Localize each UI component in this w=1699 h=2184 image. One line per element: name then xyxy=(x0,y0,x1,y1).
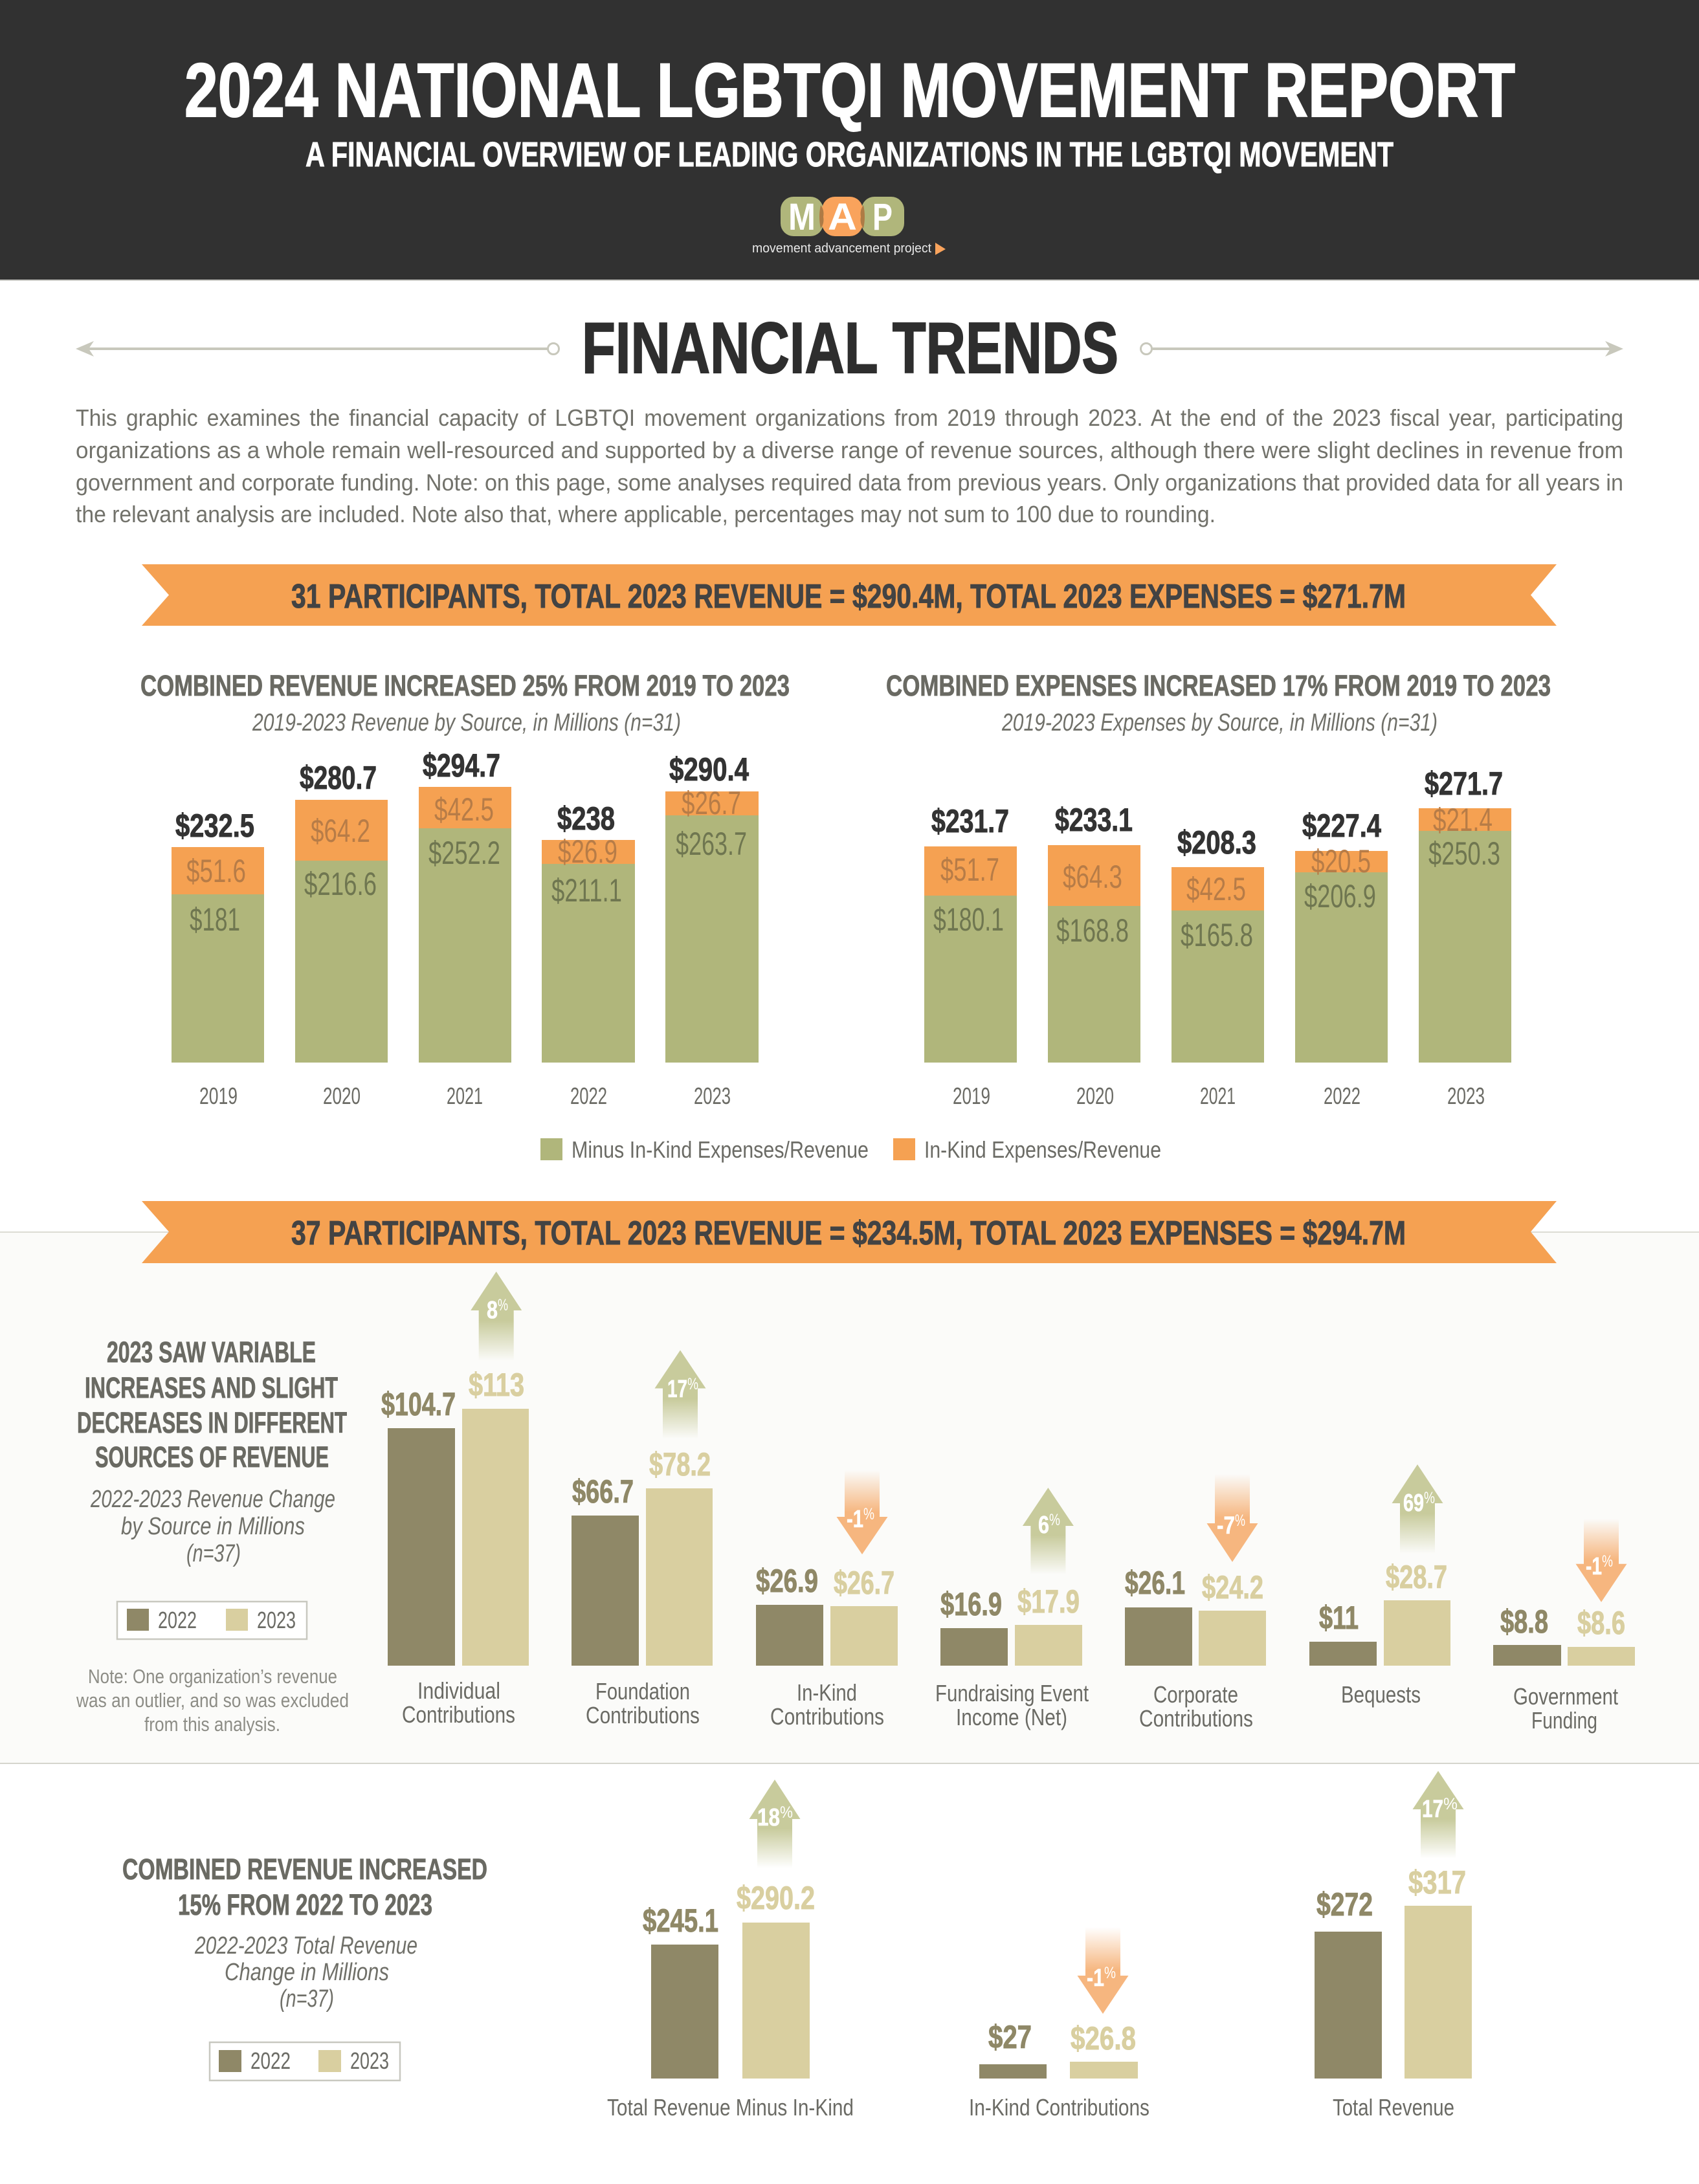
group: bequests: $28.7 xyxy=(1386,1559,1447,1595)
bar: 2020 expenses: $64.3 xyxy=(1063,859,1122,895)
subheading: total revenue change: Change in Millions xyxy=(225,1959,389,1986)
group: in-kind contributions: % xyxy=(863,1505,874,1523)
group: in-kind contributions: Contributions xyxy=(770,1703,884,1730)
bar: 2019 revenue xyxy=(172,808,264,1109)
bar: 2021 expenses xyxy=(1172,824,1264,1109)
note: outlier excluded xyxy=(76,1665,349,1736)
group: foundation contributions: Foundation xyxy=(595,1678,690,1704)
panel: combined revenue chart xyxy=(140,669,790,1109)
bar: 2023 revenue: $290.4 xyxy=(669,751,749,788)
group: total in-kind contributions: -1 xyxy=(1087,1965,1104,1992)
bar: 2021 expenses: $165.8 xyxy=(1181,917,1253,953)
banner: 31 participants: 31 PARTICIPANTS, TOTAL 2023 REVENUE = $290.4M, TOTAL 2023 EXPENSES = $271.7M xyxy=(291,578,1406,615)
logo: MAP: M xyxy=(788,196,816,238)
subheading: total revenue change: 2022-2023 Total Revenue xyxy=(194,1932,417,1959)
bar: 2019 expenses: $180.1 xyxy=(933,901,1004,938)
subheading: revenue change by source: by Source in Millions xyxy=(121,1513,305,1540)
logo: MAP: A xyxy=(828,196,857,238)
bar: 2023 expenses: $21.4 xyxy=(1433,802,1493,838)
bar: 2020 expenses: 2020 xyxy=(1076,1083,1114,1109)
group: in-kind contributions: In-Kind xyxy=(797,1679,857,1706)
group: individual contributions: % xyxy=(498,1296,508,1314)
group: total in-kind contributions: In-Kind Contributions xyxy=(969,2094,1149,2121)
group: foundation contributions: $78.2 xyxy=(649,1446,711,1483)
group: corporate contributions: $26.1 xyxy=(1125,1565,1185,1601)
bar: 2023 expenses: $271.7 xyxy=(1425,766,1503,802)
group: total in-kind contributions: $26.8 xyxy=(1071,2020,1136,2057)
group: fundraising event income: % xyxy=(1049,1511,1060,1529)
subheading: revenue change by source: (n=37) xyxy=(186,1540,241,1567)
subheading: revenue by source: 2019-2023 Revenue by Source, in Millions (n=31) xyxy=(252,709,681,736)
legend: 2022 and 2023 sources: 2023 xyxy=(257,1607,296,1633)
bar: 2021 expenses: $42.5 xyxy=(1186,871,1246,907)
bar: 2020 expenses: $233.1 xyxy=(1055,802,1133,838)
legend: 2022 and 2023 totals: 2023 xyxy=(350,2047,389,2074)
group: fundraising event income: Income (Net) xyxy=(956,1704,1067,1730)
group: total revenue minus in-kind: Total Revenue Minus In-Kind xyxy=(607,2094,854,2121)
group: corporate contributions: $24.2 xyxy=(1202,1569,1263,1605)
bar: 2020 revenue: $216.6 xyxy=(304,866,377,902)
group: government funding: Funding xyxy=(1531,1707,1597,1734)
group: total revenue: Total Revenue xyxy=(1333,2094,1454,2121)
group: corporate contributions: Contributions xyxy=(1139,1705,1253,1732)
group: government funding: -1 xyxy=(1586,1553,1602,1580)
bar: 2021 revenue xyxy=(419,747,511,1109)
note: outlier excluded: from this analysis. xyxy=(144,1713,280,1736)
bar: 2020 revenue: 2020 xyxy=(323,1083,361,1109)
group: total revenue minus in-kind: 18 xyxy=(757,1804,780,1831)
group: individual contributions: Individual xyxy=(417,1677,500,1704)
bar: 2021 expenses: 2021 xyxy=(1200,1083,1236,1109)
bar: 2020 revenue: $64.2 xyxy=(311,813,370,849)
heading: combined revenue: COMBINED REVENUE INCREASED 25% FROM 2019 TO 2023 xyxy=(140,669,790,702)
bar: 2021 revenue: 2021 xyxy=(447,1083,483,1109)
banner: 31 participants xyxy=(142,564,1557,626)
bar: 2021 revenue: $294.7 xyxy=(423,747,500,784)
panel: combined expenses chart xyxy=(886,669,1551,1109)
bar: 2019 expenses: $51.7 xyxy=(940,852,999,888)
banner: 37 participants xyxy=(142,1201,1557,1263)
group: total revenue minus in-kind: % xyxy=(780,1803,793,1822)
group: total revenue: % xyxy=(1443,1795,1458,1813)
bar: 2022 expenses: $206.9 xyxy=(1304,878,1376,914)
bar: 2022 revenue: $26.9 xyxy=(558,833,617,870)
subheading: revenue change by source: 2022-2023 Revenue Change xyxy=(90,1486,335,1513)
bar: 2022 revenue: $238 xyxy=(557,800,615,837)
group: in-kind contributions xyxy=(756,1470,898,1730)
group: fundraising event income: Fundraising Event xyxy=(935,1680,1089,1706)
subheading: revenue change by source xyxy=(90,1486,335,1567)
heading: combined revenue increased 15% xyxy=(122,1853,487,1921)
bar: 2019 expenses: 2019 xyxy=(953,1083,990,1109)
group: individual contributions: $104.7 xyxy=(381,1386,456,1422)
group: total revenue: $272 xyxy=(1316,1886,1373,1923)
intro paragraph: This graphic examines the financial capacity of LGBTQI movement organizations from 2019 through 2023. At the end of the 2023 fiscal year, participating xyxy=(76,404,1623,431)
logo: MAP xyxy=(752,196,946,256)
group: bequests xyxy=(1309,1464,1450,1708)
logo: MAP: movement advancement project xyxy=(752,241,931,256)
group: foundation contributions: 17 xyxy=(667,1376,687,1403)
group: fundraising event income: $16.9 xyxy=(940,1586,1002,1622)
panel: header band xyxy=(0,0,1699,281)
group: individual contributions xyxy=(381,1272,529,1728)
group: foundation contributions: % xyxy=(687,1375,698,1393)
bar: 2020 expenses: $168.8 xyxy=(1056,912,1129,949)
legend: 2022 and 2023 sources: 2022 xyxy=(158,1607,197,1633)
group: bequests: Bequests xyxy=(1341,1681,1421,1708)
heading: variable increases and decreases: 2023 SAW VARIABLE xyxy=(107,1336,316,1369)
intro paragraph xyxy=(76,404,1623,527)
group: in-kind contributions: $26.7 xyxy=(834,1565,894,1601)
group: total in-kind contributions xyxy=(969,1927,1149,2121)
intro paragraph: the relevant analysis are included. Note also that, where applicable, percentages may not sum to 100 due to rounding. xyxy=(76,501,1216,527)
bar: 2023 expenses: 2023 xyxy=(1447,1083,1485,1109)
bar: 2021 revenue: $42.5 xyxy=(434,791,494,828)
arrow: left heading rule xyxy=(76,341,559,357)
group: individual contributions: Contributions xyxy=(402,1701,515,1728)
legend: 2022 and 2023 sources xyxy=(117,1602,307,1639)
group: total in-kind contributions: % xyxy=(1104,1964,1116,1982)
bar: 2022 revenue: 2022 xyxy=(570,1083,607,1109)
intro paragraph: organizations as a whole remain well-resourced and supported by a diverse range of revenue sources, although there were slight declines in revenue from xyxy=(76,437,1623,463)
arrow: right heading rule xyxy=(1140,341,1623,357)
group: foundation contributions xyxy=(572,1350,713,1728)
heading: variable increases and decreases: DECREASES IN DIFFERENT xyxy=(77,1406,347,1439)
panel: revenue sources background xyxy=(0,1231,1699,1764)
heading: combined revenue increased 15%: COMBINED REVENUE INCREASED xyxy=(122,1853,487,1886)
group: fundraising event income: 6 xyxy=(1038,1512,1049,1539)
logo: MAP: P xyxy=(872,196,893,238)
bar: 2023 expenses: $250.3 xyxy=(1428,835,1500,872)
bar: 2022 expenses: $20.5 xyxy=(1311,843,1371,879)
bar: 2020 revenue: $280.7 xyxy=(300,760,377,796)
intro paragraph: government and corporate funding. Note: on this page, some analyses required data from previous years. Only organizations that provided data for all years in xyxy=(76,469,1623,496)
group: corporate contributions xyxy=(1125,1474,1266,1732)
bar: 2021 revenue: $252.2 xyxy=(428,835,500,871)
legend: 2022 and 2023 totals xyxy=(210,2042,400,2080)
group: corporate contributions: Corporate xyxy=(1153,1681,1238,1708)
bar: 2020 expenses xyxy=(1048,802,1140,1109)
bar: 2022 expenses xyxy=(1295,808,1388,1109)
group: fundraising event income: $17.9 xyxy=(1017,1583,1080,1620)
bar: 2023 expenses xyxy=(1419,766,1511,1109)
group: total revenue xyxy=(1315,1771,1472,2121)
heading: combined revenue increased 15%: 15% FROM 2022 TO 2023 xyxy=(178,1888,432,1921)
bar: 2019 expenses: $231.7 xyxy=(931,803,1009,839)
note: outlier excluded: Note: One organization’s revenue xyxy=(88,1665,337,1688)
note: outlier excluded: was an outlier, and so was excluded xyxy=(76,1689,349,1712)
legend: 2022 and 2023 totals: 2022 xyxy=(250,2047,291,2074)
group: total revenue minus in-kind xyxy=(607,1780,854,2121)
bar: 2022 expenses: 2022 xyxy=(1324,1083,1360,1109)
bar: 2023 revenue: 2023 xyxy=(694,1083,731,1109)
subtitle: A FINANCIAL OVERVIEW OF LEADING ORGANIZATIONS IN THE LGBTQI MOVEMENT xyxy=(305,135,1394,174)
legend: expenses and revenue: Minus In-Kind Expenses/Revenue xyxy=(572,1136,869,1163)
heading: financial trends: FINANCIAL TRENDS xyxy=(582,308,1118,388)
bar: 2021 expenses: $208.3 xyxy=(1177,824,1256,861)
subheading: total revenue change xyxy=(194,1932,417,2013)
group: in-kind contributions: $26.9 xyxy=(756,1563,818,1599)
group: total revenue: $317 xyxy=(1408,1864,1466,1901)
bar: 2019 revenue: 2019 xyxy=(199,1083,238,1109)
group: corporate contributions: -7 xyxy=(1217,1512,1235,1539)
group: in-kind contributions: -1 xyxy=(847,1506,863,1533)
bar: 2019 revenue: $232.5 xyxy=(175,808,254,844)
group: foundation contributions: Contributions xyxy=(586,1702,700,1728)
group: government funding: $8.8 xyxy=(1500,1604,1548,1640)
bar: 2020 revenue xyxy=(295,760,388,1109)
subheading: expenses by source: 2019-2023 Expenses by Source, in Millions (n=31) xyxy=(1001,709,1438,736)
group: total revenue: 17 xyxy=(1422,1796,1443,1823)
bar: 2019 revenue: $51.6 xyxy=(186,853,246,889)
group: total revenue minus in-kind: $245.1 xyxy=(643,1903,718,1939)
group: bequests: 69 xyxy=(1403,1490,1424,1517)
group: fundraising event income xyxy=(935,1488,1089,1730)
bar: 2023 revenue xyxy=(665,751,759,1109)
group: government funding: Government xyxy=(1513,1683,1618,1710)
banner: 37 participants: 37 PARTICIPANTS, TOTAL 2023 REVENUE = $234.5M, TOTAL 2023 EXPENSES = $294.7M xyxy=(291,1215,1406,1252)
legend: expenses and revenue xyxy=(540,1136,1161,1163)
bar: 2022 revenue xyxy=(542,800,635,1109)
bar: 2019 revenue: $181 xyxy=(190,901,240,938)
group: foundation contributions: $66.7 xyxy=(572,1473,634,1510)
bar: 2023 revenue: $26.7 xyxy=(682,785,741,821)
group: government funding xyxy=(1493,1519,1635,1734)
legend: expenses and revenue: In-Kind Expenses/Revenue xyxy=(924,1136,1161,1163)
group: bequests: % xyxy=(1424,1489,1435,1507)
heading: variable increases and decreases: INCREASES AND SLIGHT xyxy=(85,1371,338,1404)
group: government funding: $8.6 xyxy=(1577,1605,1625,1641)
bar: 2019 expenses xyxy=(924,803,1017,1109)
group: individual contributions: $113 xyxy=(469,1367,524,1403)
bar: 2023 revenue: $263.7 xyxy=(676,826,747,862)
group: total in-kind contributions: $27 xyxy=(988,2019,1032,2055)
group: government funding: % xyxy=(1602,1552,1613,1571)
group: corporate contributions: % xyxy=(1235,1512,1245,1530)
group: individual contributions: 8 xyxy=(487,1297,498,1324)
bar: 2022 revenue: $211.1 xyxy=(551,872,622,909)
bar: 2022 expenses: $227.4 xyxy=(1302,808,1381,844)
heading: variable increases and decreases xyxy=(77,1336,347,1473)
group: total revenue minus in-kind: $290.2 xyxy=(737,1880,815,1916)
subheading: total revenue change: (n=37) xyxy=(280,1985,334,2013)
heading: variable increases and decreases: SOURCES OF REVENUE xyxy=(95,1440,329,1473)
group: bequests: $11 xyxy=(1319,1600,1359,1636)
